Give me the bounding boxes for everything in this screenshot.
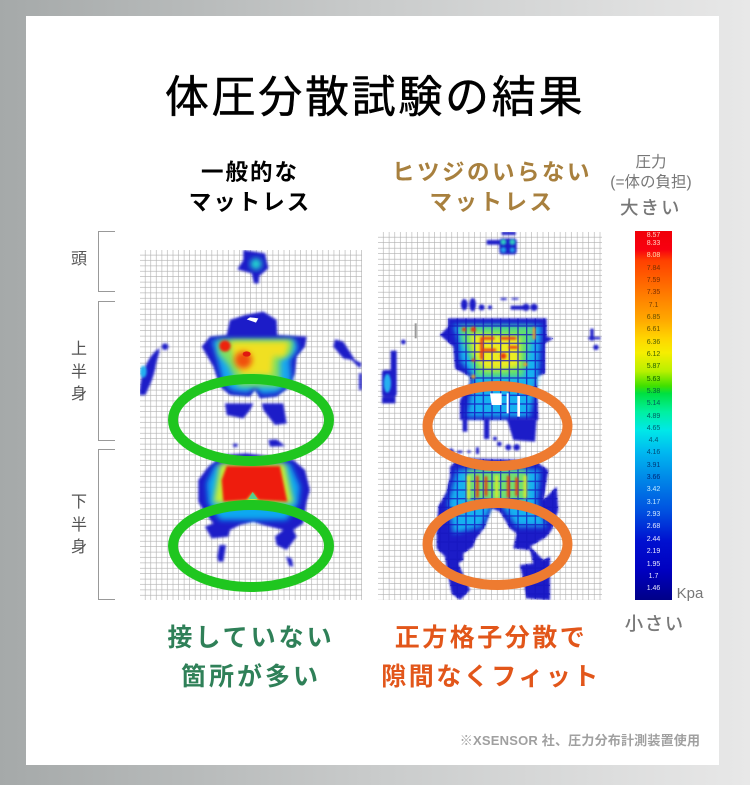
scale values: 8.08	[647, 252, 660, 259]
scale values	[646, 232, 660, 592]
scale values: 6.12	[647, 351, 660, 358]
scale values: 3.42	[647, 486, 660, 493]
lower body pressure blobs	[198, 439, 310, 567]
conclusion: Hitsuji mattress: 正方格子分散で	[395, 624, 587, 652]
lower body pressure pattern	[433, 418, 560, 602]
conclusion: standard mattress	[167, 624, 335, 691]
footnote: ※XSENSOR 社、圧力分布計測装置使用	[460, 733, 700, 748]
scale values: 3.91	[647, 462, 660, 469]
scale values: 1.46	[647, 585, 660, 592]
bracket: head	[98, 231, 115, 292]
body region labels	[71, 231, 115, 600]
thigh blob	[437, 458, 558, 600]
shoulder dots	[461, 298, 538, 311]
heading: standard mattress	[189, 160, 311, 215]
orange ellipses	[428, 386, 568, 585]
label: upper body: 身	[71, 386, 87, 403]
scale values: 7.1	[649, 302, 658, 309]
leg fragments	[217, 439, 293, 567]
label: lower body: 下	[71, 494, 87, 511]
heading: Hitsuji mattress: ヒツジのいらない	[392, 160, 592, 185]
abdomen fragments	[448, 418, 537, 455]
hot spots	[482, 328, 534, 358]
scale values: 6.85	[647, 314, 660, 321]
scale values: 1.95	[647, 561, 660, 568]
head blob	[237, 250, 268, 283]
conclusion: standard mattress: 箇所が多い	[181, 663, 321, 691]
unit label: Kpa	[677, 585, 703, 602]
label: upper body: 上	[71, 341, 87, 358]
torso	[202, 312, 307, 398]
scale values: 5.14	[647, 400, 660, 407]
scale values: 1.7	[649, 573, 658, 580]
torso	[440, 318, 553, 420]
scale values: 3.17	[647, 499, 660, 506]
pressure legend heading: (=体の負担)	[610, 174, 692, 191]
scale values: 4.16	[647, 449, 660, 456]
scale values: 7.35	[647, 289, 660, 296]
scale values: 8.33	[647, 240, 660, 247]
gray artefact bar	[415, 323, 417, 338]
scale values: 5.87	[647, 363, 660, 370]
heading: Hitsuji mattress: マットレス	[429, 190, 554, 215]
label: upper body	[71, 340, 87, 403]
scale values: 7.59	[647, 277, 660, 284]
conclusion: Hitsuji mattress: 隙間なくフィット	[381, 663, 601, 691]
scale values: 8.57	[647, 232, 660, 239]
arms	[139, 339, 362, 395]
scale values: 7.84	[647, 265, 660, 272]
pressure legend heading: 大きい	[620, 198, 682, 218]
heading: standard mattress: マットレス	[189, 190, 311, 215]
heat map: standard mattress	[140, 250, 362, 600]
sensor grid	[140, 250, 362, 600]
green ellipses	[173, 379, 329, 587]
scale low label: 小さい	[625, 614, 685, 634]
upper body pressure pattern	[382, 232, 600, 422]
bracket: upper body	[98, 301, 115, 441]
pressure legend heading	[610, 154, 692, 218]
thigh blob	[198, 453, 310, 550]
heading: standard mattress: 一般的な	[201, 160, 299, 185]
pressure colour scale	[635, 231, 672, 600]
scale values: 6.61	[647, 326, 660, 333]
scale values: 2.93	[647, 511, 660, 518]
label: head: 頭	[71, 251, 87, 268]
scale values: 2.68	[647, 523, 660, 530]
upper body pressure blobs	[139, 250, 362, 425]
scale values: 4.4	[649, 437, 658, 444]
label: upper body: 半	[71, 364, 87, 380]
right arm dots	[588, 329, 600, 350]
scale values: 6.36	[647, 339, 660, 346]
scale values: 2.19	[647, 548, 660, 555]
heat map: Hitsuji mattress	[378, 232, 602, 600]
label: lower body: 半	[71, 516, 87, 534]
conclusion: Hitsuji mattress	[381, 624, 601, 691]
scale values: 5.38	[647, 388, 660, 395]
scale values: 2.44	[647, 536, 660, 543]
heading: Hitsuji mattress	[392, 160, 592, 215]
label: lower body	[71, 494, 87, 556]
head dots	[487, 232, 517, 254]
sensor grid	[378, 232, 602, 600]
conclusion: standard mattress: 接していない	[167, 624, 335, 652]
scale values: 3.66	[647, 474, 660, 481]
label: lower body: 身	[71, 539, 87, 556]
title: 体圧分散試験の結果	[165, 73, 585, 122]
pressure legend heading: 圧力	[635, 154, 666, 171]
hot strips	[469, 477, 525, 498]
bracket: lower body	[98, 449, 115, 600]
scale values: 4.89	[647, 413, 660, 420]
scale values: 4.65	[647, 425, 660, 432]
scale values: 5.63	[647, 376, 660, 383]
left arm dots	[382, 340, 406, 403]
hips	[225, 403, 287, 425]
